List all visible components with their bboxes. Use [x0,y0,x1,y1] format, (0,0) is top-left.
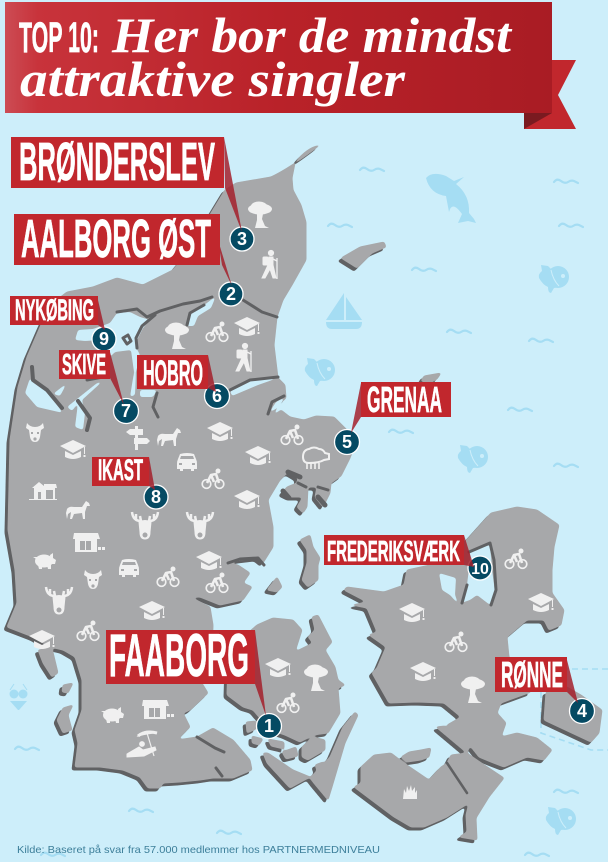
text: FAABORG [109,622,249,689]
pin 7: 7 [121,401,131,421]
pin 9 [92,327,116,351]
label: Faaborg [106,622,255,689]
label: Skive: SKIVE [62,349,106,381]
icon: hiker [236,343,251,372]
label: Nykøbing [10,294,98,327]
icon: car [119,559,139,577]
icon: horse [157,428,181,446]
label: Grenaa [361,379,451,420]
icon: graduation cap [139,601,165,620]
dashed sea boundary [541,669,608,750]
icon: deer [132,512,158,539]
icon: car [177,453,197,471]
icon: farm shop [73,533,105,552]
Limfjord and fjords [25,296,495,605]
banner body [5,2,552,113]
pin 7 [114,398,138,424]
pin 1: 1 [264,716,274,736]
label: Frederiksværk [324,535,464,568]
text: HOBRO [143,354,203,393]
icon: bike [277,692,299,712]
title text: Her bor de mindst [111,7,513,63]
pin 10: 10 [471,561,489,578]
icon: graduation cap [399,603,425,622]
pin 2: 2 [226,284,236,304]
title text [19,7,513,107]
icon: graduation cap [265,658,291,677]
icon: graduation cap [60,440,86,459]
icon: tree [304,664,328,691]
icon: fish [546,807,576,835]
icon: fish [539,265,569,293]
icon: graduation cap [207,422,233,441]
label: Skive [59,349,110,381]
label leaders [98,137,578,716]
icon: pig [33,553,56,569]
icon: bike [505,548,527,568]
pin 8 [144,485,168,509]
pin 3 [230,227,254,251]
icon: fish [305,358,335,386]
icon: bike [157,566,179,586]
icon: hiker [262,250,277,279]
icon: horse [66,501,90,519]
icon: deer [187,512,213,539]
icon: graduation cap [234,317,260,336]
icon: bike [206,572,228,592]
icon: pig [101,707,124,723]
label: Hobro [137,354,208,393]
pin 5 [334,430,360,454]
icon: graduation cap [234,490,260,509]
icon: bike [281,424,303,444]
pin 6 [204,384,230,408]
title text: TOP 10: [19,14,99,62]
label: Rønne [495,654,567,695]
icon: bike [202,468,224,488]
map of Denmark [4,145,602,843]
icon: tree [248,202,272,228]
pin 2 [219,282,243,306]
label: Grenaa: GRENAA [367,379,442,420]
icon: graduation cap [410,662,436,681]
icon: tree [461,676,485,703]
icon: cow [26,423,44,442]
source note: Kilde: Baseret på svar fra 57.000 medlemmer hos PARTNERMEDNIVEAU [17,844,380,856]
icon: sheep [303,448,329,469]
icon: graduation cap [29,630,55,649]
pin 10 [468,556,492,580]
icon: bikini [10,684,28,710]
icon: graduation cap [528,593,554,612]
icon: sailboat [326,293,362,329]
icon: house [29,482,57,500]
label: Brønderslev [11,132,224,192]
title text: attraktive singler [20,51,406,107]
text: BRØNDERSLEV [19,132,215,192]
pin 6: 6 [212,386,222,406]
pin 1 [256,714,282,738]
icon: whale [426,174,476,223]
pin 8: 8 [151,487,161,507]
pin 4 [570,698,594,724]
icon: farm shop [142,700,174,719]
icon: deer [46,587,72,614]
waves [15,168,583,856]
coast shadows [32,297,496,793]
map icons [26,202,554,799]
number pins [92,227,594,738]
pin 5: 5 [342,432,352,452]
icon: bike [206,322,228,341]
label: Ikast [92,454,149,487]
icon: bike [77,620,99,640]
pin 3: 3 [237,229,247,249]
pin 9: 9 [99,329,109,349]
icon: graduation cap [245,446,271,465]
icon: graduation cap [196,551,222,570]
icon: cow [84,570,102,589]
ribbon fold [524,113,552,129]
icon: bike [445,632,467,651]
pin 4: 4 [577,701,587,721]
icon: grass [403,785,417,799]
label: Ikast: IKAST [98,454,143,487]
icon: fish [458,445,488,473]
label: Frederiksværk: FREDERIKSVÆRK [327,536,460,568]
title banner [5,2,576,129]
text: AALBORG ØST [21,209,211,269]
label: Nykøbing: NYKØBING [15,294,94,327]
ribbon tail [524,60,576,129]
icon: signpost [126,426,150,450]
icon: tree [165,322,189,349]
icon: sunbather [127,731,157,757]
label: Aalborg Øst [14,209,220,269]
sea decorations [10,168,583,856]
